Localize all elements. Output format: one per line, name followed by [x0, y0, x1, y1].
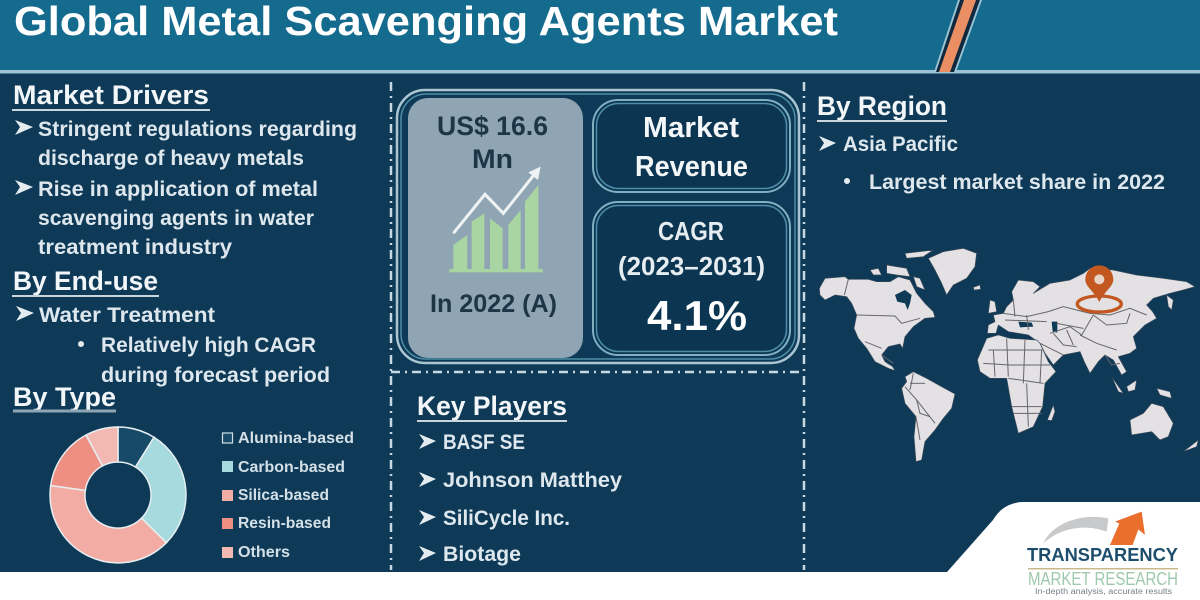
driver 2: treatment industry [38, 236, 232, 259]
panel: by end-use [12, 266, 330, 387]
market value card: US$ 16.6 [437, 111, 548, 141]
player list: SiliCycle Inc. [443, 507, 570, 530]
outer frame [397, 90, 799, 363]
player list: Johnson Matthey [443, 469, 622, 492]
legend: Silica-based [238, 487, 329, 504]
panel: by region [817, 91, 1198, 462]
market revenue card: Revenue [635, 151, 748, 183]
heading: by end-use: By End-use [13, 266, 158, 296]
panel: key players [417, 391, 622, 566]
region item: Largest market share in 2022 [869, 171, 1165, 194]
region item: Asia Pacific [843, 133, 958, 156]
end-use item: Water Treatment [39, 304, 215, 327]
CAGR card: CAGR [658, 216, 724, 246]
driver 1: Stringent regulations regarding [38, 118, 357, 141]
logo wordmark [1027, 545, 1178, 596]
end-use item: Relatively high CAGR [101, 334, 316, 357]
market value card [408, 98, 583, 358]
CAGR card [593, 202, 790, 355]
logo panel [947, 502, 1200, 596]
header banner [0, 0, 1200, 74]
CAGR card: (2023–2031) [618, 251, 765, 281]
heading: by type: By Type [13, 382, 116, 412]
panel: market stats [397, 90, 799, 363]
legend [222, 430, 354, 561]
heading: market drivers: Market Drivers [13, 80, 209, 110]
legend: Resin-based [238, 515, 331, 532]
CAGR card: 4.1% [647, 292, 747, 339]
logo wordmark: TRANSPARENCY [1027, 545, 1178, 565]
legend: Alumina-based [238, 430, 354, 447]
dashed panel dividers [391, 82, 804, 570]
driver 1 [15, 118, 357, 170]
panel: market drivers [12, 80, 357, 259]
logo wordmark: In-depth analysis, accurate results [1035, 587, 1172, 596]
end-use item: during forecast period [101, 364, 330, 387]
world map [819, 248, 1198, 462]
icon: growth chart [449, 167, 543, 272]
driver 1: discharge of heavy metals [38, 147, 304, 170]
market value card: Mn [472, 144, 513, 174]
icon: logo arrow [1043, 512, 1145, 545]
map: eurasia, africa, oceania [973, 268, 1198, 452]
market revenue card: Market [643, 112, 739, 144]
player list [419, 431, 622, 566]
legend: Others [238, 544, 290, 561]
market revenue card [593, 100, 790, 192]
end-use item [16, 304, 330, 387]
driver 2 [15, 178, 318, 259]
driver 2: scavenging agents in water [38, 207, 314, 230]
region item [819, 133, 1165, 194]
market value card: In 2022 (A) [430, 290, 557, 318]
donut chart [50, 427, 186, 563]
panel: by type [13, 382, 354, 563]
player list: BASF SE [443, 431, 525, 454]
player list: Biotage [443, 543, 521, 566]
driver 2: Rise in application of metal [38, 178, 318, 201]
heading: by region: By Region [817, 91, 947, 121]
heading: key players: Key Players [417, 391, 567, 421]
legend: Carbon-based [238, 459, 345, 476]
map: americas [819, 248, 977, 462]
icon: location pin [1077, 265, 1121, 312]
